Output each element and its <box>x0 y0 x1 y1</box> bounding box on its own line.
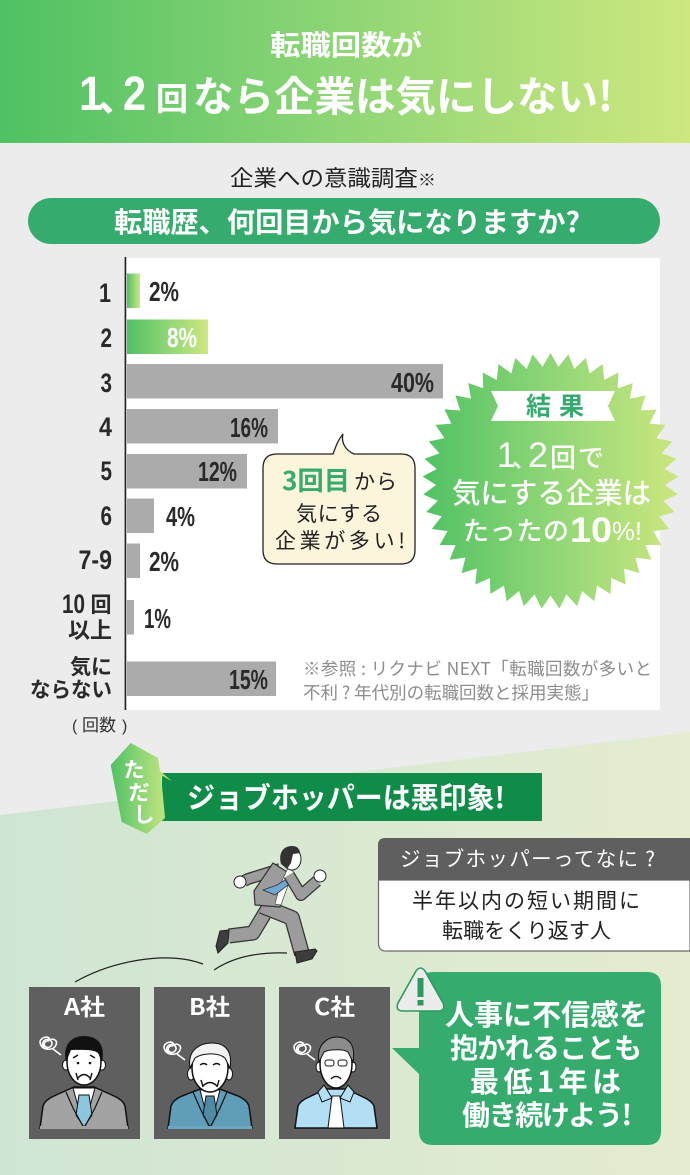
company card B: B社 <box>189 988 230 1022</box>
title line 2: 、 <box>98 65 138 123</box>
bar chart panel <box>30 257 660 710</box>
bar 5: 5 <box>100 456 112 486</box>
advice callout: 最低1年は <box>470 1059 621 1101</box>
result starburst: 結 果 <box>526 387 584 423</box>
source note <box>303 656 652 705</box>
advice callout: 人事に不信感を <box>445 992 648 1034</box>
bar no concern: 気に <box>70 651 112 681</box>
axis unit label: ( <box>72 718 78 735</box>
survey heading: 企業への意識調査 ※ <box>230 161 436 193</box>
bar 6 <box>100 498 195 533</box>
bar 10 or more: 10 <box>62 589 85 619</box>
definition box: 転職をくり返す人 <box>442 915 611 945</box>
tie <box>263 875 293 895</box>
question pill: 転職歴、何回目から気になりますか? <box>114 201 580 241</box>
axis line <box>125 257 126 710</box>
bar 4: 16% <box>230 412 268 443</box>
result text: 、 <box>512 439 537 475</box>
tag: however: た <box>124 754 144 784</box>
bar 10 or more: 以上 <box>68 613 112 645</box>
title line 1: 転職回数が <box>270 24 422 64</box>
source note: ※参照 : リクナビ NEXT「転職回数が多いと <box>303 656 652 681</box>
bar 2: 2 <box>100 323 112 353</box>
result text: 2 <box>528 436 548 475</box>
title line 2: 回 <box>156 74 188 120</box>
bar 1 <box>99 274 179 308</box>
tag: however: だ <box>128 777 150 807</box>
illustration: running man <box>216 846 326 963</box>
result text: 1 <box>497 436 516 475</box>
company card C: C社 <box>314 988 355 1022</box>
bar no concern: 15% <box>229 664 268 695</box>
source note: 不利 ? 年代別の転職回数と採用実態」 <box>303 680 599 705</box>
bar 10 or more <box>62 589 171 645</box>
result text <box>452 436 651 550</box>
person A <box>40 1036 128 1129</box>
company card B <box>154 987 265 1139</box>
bar 5: 12% <box>198 456 237 487</box>
bar 1: 1 <box>99 278 111 308</box>
definition box: 半年以内の短い期間に <box>412 885 640 915</box>
back arm <box>244 869 280 881</box>
bar 6: 4% <box>166 501 195 532</box>
definition box <box>378 838 690 951</box>
bar 7-9: 7-9 <box>78 545 112 575</box>
shirt <box>275 868 294 905</box>
bar 3: 40% <box>391 367 434 398</box>
advice callout: 働き続けよう! <box>462 1094 632 1134</box>
speech bubble: third time: 3回目 <box>282 461 350 498</box>
axis unit label: ) <box>122 718 127 735</box>
speech bubble: third time: から <box>354 466 397 496</box>
title line 2: なら企業は気にしない! <box>193 63 613 123</box>
bar 2 <box>100 320 208 354</box>
bar 6: 6 <box>100 501 112 531</box>
axis unit label: 回数 <box>82 711 116 736</box>
bar 10 or more: 回 <box>90 589 112 619</box>
torso <box>254 863 292 907</box>
bar 2: 8% <box>167 322 197 353</box>
bar 1: 2% <box>149 276 179 307</box>
definition box: ジョブホッパーってなに ? <box>400 842 655 872</box>
title line 2: 1 <box>79 68 103 121</box>
bar no concern: ならない <box>30 674 112 704</box>
tag: however <box>111 743 172 834</box>
company card A <box>29 987 140 1139</box>
bar 7-9 <box>78 544 179 578</box>
speech bubble: third time: 気にする <box>296 498 382 528</box>
bar 4 <box>99 409 278 444</box>
bar 7-9: 2% <box>149 546 179 577</box>
advice callout <box>392 972 661 1145</box>
result text: 10 <box>570 511 612 550</box>
axis unit label <box>72 711 127 736</box>
back leg <box>229 908 268 936</box>
header banner <box>0 0 690 143</box>
jump arcs <box>75 953 287 982</box>
speech bubble: third time: 企業が多い! <box>275 525 405 555</box>
person B <box>164 1042 252 1129</box>
bar 10 or more: 1% <box>144 603 171 634</box>
result text: %! <box>612 516 642 546</box>
front leg <box>262 906 302 954</box>
icon: warning triangle <box>397 968 444 1011</box>
question pill <box>28 198 660 244</box>
lower section background: green diagonal <box>0 732 690 1175</box>
result ribbon <box>491 391 615 421</box>
bar 4: 4 <box>99 412 112 442</box>
company card C <box>279 987 390 1139</box>
bar 3 <box>100 364 443 398</box>
speech bubble: third time <box>263 434 415 564</box>
subheading banner: ジョブホッパーは悪印象! <box>187 775 505 817</box>
bar no concern <box>30 651 276 704</box>
bar 3: 3 <box>100 368 112 398</box>
person C <box>294 1037 377 1128</box>
tag: however: し <box>134 799 154 829</box>
result text: たったの <box>463 511 569 548</box>
result text: 気にする企業は <box>452 471 651 512</box>
result starburst <box>420 350 682 612</box>
bar 5 <box>100 454 247 488</box>
title line 2: 2 <box>123 68 146 121</box>
front arm <box>289 875 317 895</box>
result text: 回で <box>550 438 604 475</box>
head <box>283 848 301 870</box>
advice callout: 抱かれることも <box>450 1027 642 1067</box>
company card A: A社 <box>63 988 105 1022</box>
